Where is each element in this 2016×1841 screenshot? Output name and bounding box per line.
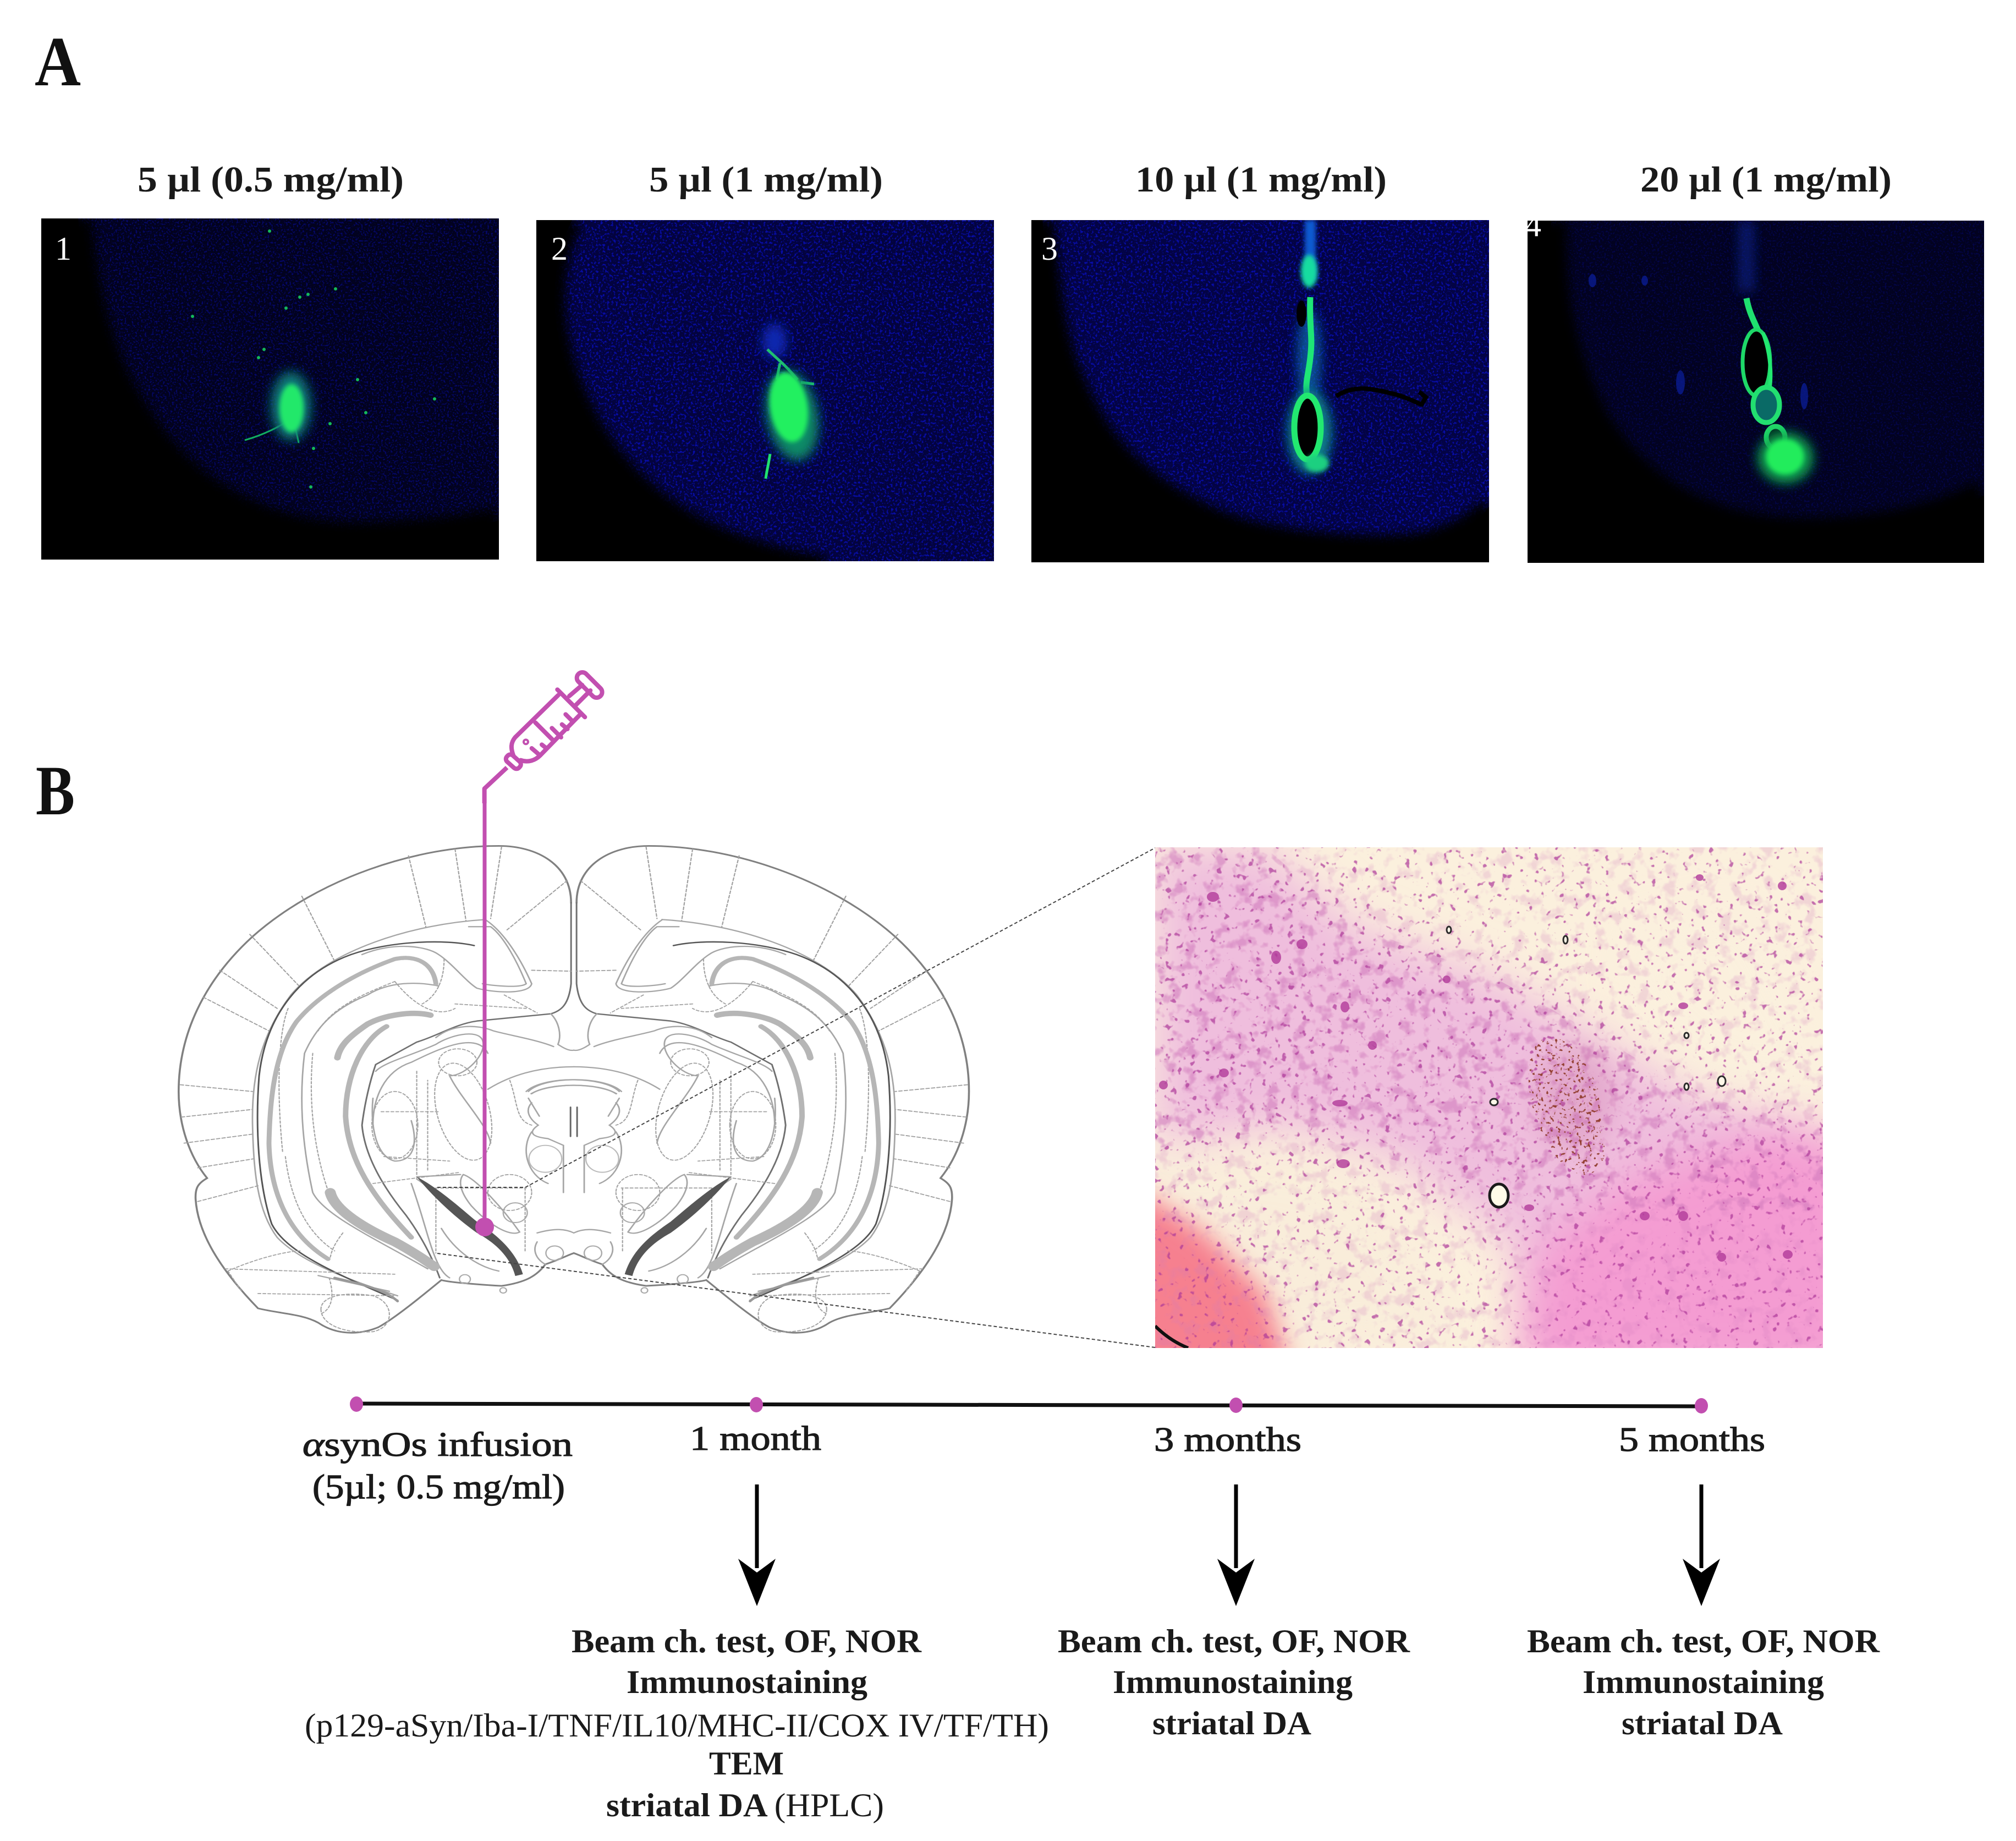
outcomes at 1 month: TEM (709, 1745, 784, 1782)
panel heading B: B (36, 752, 75, 830)
outcomes at 3 months: Immunostaining (1113, 1664, 1353, 1700)
zoom guide lines (437, 848, 1155, 1347)
outcomes at 1 month: Beam ch. test, OF, NOR (572, 1623, 922, 1659)
arrow: 3 months (1217, 1484, 1255, 1606)
panel number 3: 3 (1041, 231, 1058, 267)
label: dose: (5µl; 0.5 mg/ml) (312, 1469, 565, 1506)
outcomes at 3 months: striatal DA (1152, 1705, 1311, 1741)
coronal brain atlas section (179, 846, 969, 1333)
micrograph 2 (536, 220, 994, 572)
timeline (303, 1396, 1765, 1506)
timeline marker: 3 months (1229, 1398, 1243, 1413)
icon: syringe (485, 670, 605, 803)
panel heading A: A (35, 23, 81, 101)
panel A: fluorescence micrographs (41, 160, 1984, 572)
outcomes at 1 month: (p129-aSyn/Iba-I/TNF/IL10/MHC-II/COX IV/TF/TH) (305, 1707, 1049, 1744)
micrograph 4 (1528, 221, 1984, 563)
injection needle and target dot (475, 789, 494, 1236)
outer contour (179, 846, 574, 1333)
timeline marker: 5 months (1695, 1398, 1708, 1413)
histology micrograph (1155, 847, 1823, 1348)
column title 1: 5 µl (0.5 mg/ml) (138, 160, 404, 200)
outcomes at 5 months (1527, 1623, 1880, 1741)
mirrored hemisphere (529, 846, 969, 1333)
cortical radial divisions (180, 847, 571, 1202)
column title 2: 5 µl (1 mg/ml) (649, 160, 883, 200)
panel number 1: 1 (55, 231, 72, 267)
substantia nigra (417, 1177, 523, 1276)
label: 1 month: 1 month (690, 1420, 821, 1458)
outcomes at 3 months (1058, 1623, 1410, 1741)
hippocampal layers (269, 958, 436, 1267)
subcortical dashed outlines (225, 959, 537, 1332)
column title 3: 10 µl (1 mg/ml) (1135, 160, 1387, 200)
micrograph 3 (1031, 220, 1489, 562)
timeline marker: infusion (350, 1396, 363, 1412)
outcomes at 5 months: striatal DA (1622, 1705, 1783, 1741)
panel number 2: 2 (551, 231, 568, 267)
outcomes at 1 month (305, 1623, 1049, 1823)
outcomes at 1 month: striatal DA (HPLC) (606, 1787, 884, 1823)
outcomes at 5 months: Beam ch. test, OF, NOR (1527, 1623, 1880, 1659)
label: 3 months: 3 months (1154, 1421, 1301, 1459)
arrow: 5 months (1683, 1484, 1720, 1606)
arrow: 1 month (738, 1484, 776, 1606)
subcortical solid outlines (252, 919, 619, 1296)
micrograph 1 (41, 218, 499, 560)
column title 4: 20 µl (1 mg/ml) (1640, 160, 1892, 200)
outcomes at 3 months: Beam ch. test, OF, NOR (1058, 1623, 1410, 1659)
outcomes at 1 month: Immunostaining (627, 1664, 867, 1700)
label: 5 months: 5 months (1619, 1421, 1765, 1459)
outcomes at 5 months: Immunostaining (1583, 1664, 1824, 1700)
panel number 4: 4 (1525, 207, 1541, 243)
timeline marker: 1 month (750, 1397, 763, 1412)
label: infusion: αsynOs infusion (303, 1426, 573, 1464)
